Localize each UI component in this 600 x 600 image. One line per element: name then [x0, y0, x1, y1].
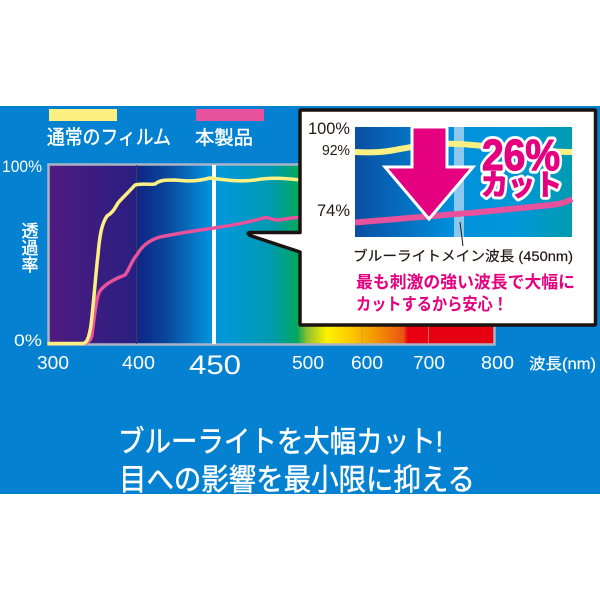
blue background panel	[0, 106, 600, 494]
message	[356, 272, 575, 314]
x axis labels	[37, 350, 596, 380]
arrow: 26% drop	[385, 127, 473, 219]
y axis title: 過	[22, 239, 38, 258]
26% cut label: カット	[481, 170, 562, 202]
x axis labels: 500	[292, 353, 324, 373]
26% cut label	[481, 131, 562, 202]
legend: this product: 本製品	[195, 127, 253, 149]
y axis title: 透	[22, 222, 38, 241]
x axis labels: 450	[189, 350, 241, 380]
inset y labels: 92%	[322, 143, 350, 159]
x axis labels: 400	[122, 353, 155, 373]
x axis labels: 700	[413, 353, 445, 373]
legend: regular film: 通常のフィルム	[47, 126, 171, 149]
headline: 目への影響を最小限に抑える	[119, 464, 475, 497]
inset chart	[355, 127, 572, 237]
y axis labels	[2, 157, 42, 350]
26% cut label: カット	[481, 170, 562, 202]
yellow curve: regular film	[49, 178, 300, 344]
x axis labels: 800	[481, 353, 514, 373]
26% cut label: 26%	[482, 131, 560, 180]
y axis labels: 0%	[14, 331, 42, 350]
y axis title: 率	[22, 256, 38, 275]
x axis labels: 波長(nm)	[529, 355, 596, 373]
inset y labels	[308, 119, 350, 220]
x axis labels: 300	[37, 353, 69, 373]
450nm marker	[212, 165, 216, 344]
legend: regular film	[47, 109, 171, 149]
y axis title	[22, 222, 38, 275]
message: カットするから安心！	[356, 295, 508, 314]
legend: this product	[195, 109, 264, 149]
spectrum chart	[48, 164, 494, 344]
x axis labels: 600	[351, 353, 383, 373]
headline: ブルーライトを大幅カット!	[118, 426, 443, 459]
inset y labels: 74%	[317, 201, 350, 220]
leader line	[460, 222, 463, 246]
pink curve: this product	[83, 218, 300, 344]
callout bubble	[248, 110, 596, 325]
message: 最も刺激の強い波長で大幅に	[356, 272, 575, 292]
caption: blue light main wavelength: ブルーライトメイン波長 (450nm)	[353, 248, 573, 264]
inset y labels: 100%	[308, 119, 350, 138]
headline	[118, 426, 475, 497]
26% cut label: 26%	[482, 131, 560, 180]
y axis labels: 100%	[2, 157, 42, 176]
